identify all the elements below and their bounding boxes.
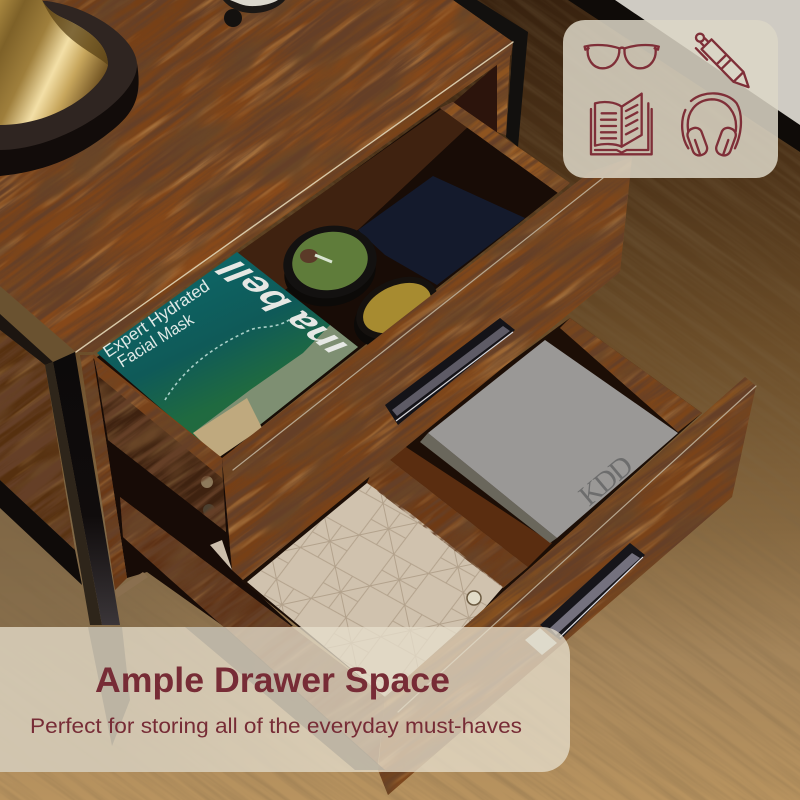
handle end cap	[525, 628, 557, 655]
lower rim	[385, 377, 756, 715]
upper front	[222, 157, 632, 580]
book subtitle line 1: Expert Hydrated	[100, 276, 213, 361]
upper handle	[385, 318, 515, 425]
icon: open book	[591, 94, 652, 154]
nightstand body	[0, 0, 528, 626]
lower wood rail	[380, 430, 552, 567]
green jar	[277, 218, 383, 313]
upper left wall	[95, 360, 226, 532]
upper left rim	[93, 354, 222, 478]
lower left wall	[120, 497, 385, 765]
facial mask book	[97, 252, 358, 458]
bronze top strip	[0, 286, 76, 362]
icons group	[585, 30, 754, 157]
tabletop	[0, 0, 513, 352]
book sand area	[193, 398, 262, 458]
bottom black rail	[0, 480, 82, 585]
notebook logo: KDD	[573, 449, 639, 512]
gold cone	[0, 0, 108, 125]
lower drawer interior	[240, 318, 702, 697]
lamp base top	[0, 0, 137, 150]
icon: headphones	[682, 93, 741, 157]
upper drawer	[93, 102, 632, 580]
icon: pen	[690, 30, 754, 94]
rear black frame	[453, 0, 528, 147]
upper right wall	[440, 102, 570, 193]
leg bronze side	[45, 362, 102, 625]
rear opening	[453, 62, 500, 133]
beige pouch	[210, 483, 503, 697]
lower handle	[540, 543, 645, 640]
wooden post	[80, 355, 127, 590]
black leg	[53, 352, 120, 625]
dark carcass	[93, 358, 293, 626]
panel: caption	[0, 627, 570, 772]
small skirting	[115, 572, 148, 598]
thin edge highlights	[76, 42, 756, 712]
grey notebook	[420, 340, 678, 543]
left side panel	[0, 330, 75, 550]
navy wallet	[358, 176, 525, 285]
upper interior	[93, 108, 570, 458]
lower bottom board	[367, 452, 528, 588]
leg shadow under caption	[88, 627, 385, 770]
lower drawer	[120, 318, 756, 795]
gold inner shadow	[42, 0, 108, 65]
table apron	[76, 42, 513, 352]
panel: icons	[563, 20, 778, 178]
table lamp	[0, 0, 139, 176]
wall bolts	[201, 476, 215, 516]
book haze area	[193, 325, 358, 458]
subheading: Perfect for storing all of the everyday must-haves	[30, 715, 522, 738]
wall corner	[568, 0, 800, 152]
lower front	[378, 377, 756, 795]
book title: ına bell	[206, 256, 358, 359]
yellow jar	[344, 264, 448, 360]
small clock	[223, 0, 285, 27]
rear post	[497, 55, 510, 135]
lower right wall	[560, 318, 702, 432]
icon: glasses	[585, 45, 659, 68]
inner wood wall	[225, 105, 470, 290]
book subtitle line 2: Facial Mask	[114, 309, 197, 371]
snap button	[467, 591, 481, 605]
heading: Ample Drawer Space	[95, 661, 450, 700]
lamp base side	[0, 63, 139, 176]
book foam	[165, 318, 292, 400]
